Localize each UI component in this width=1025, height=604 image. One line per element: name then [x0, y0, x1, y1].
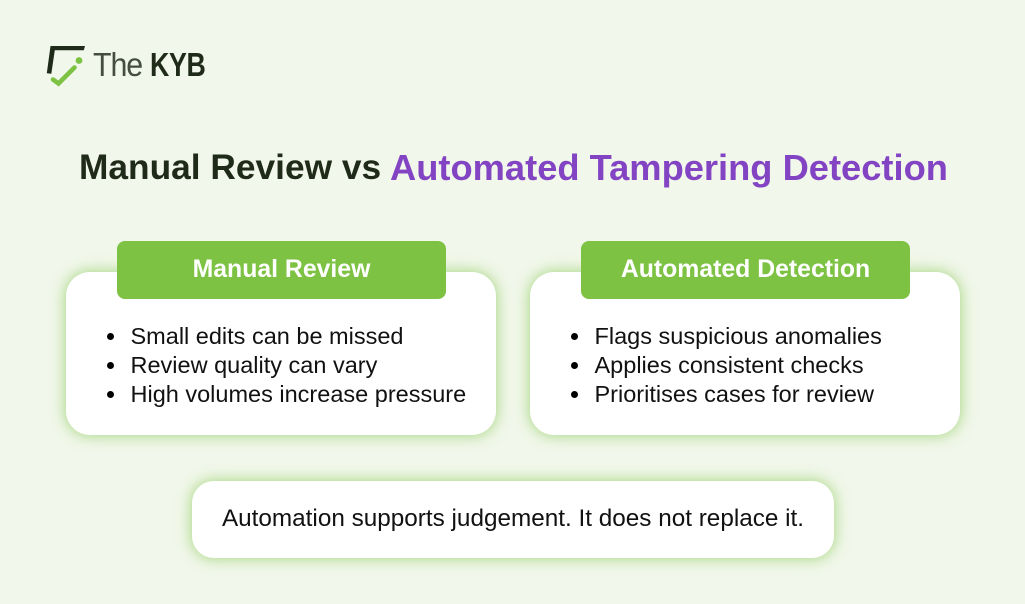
heading: automated detection: [581, 241, 910, 299]
bullet list: [107, 323, 466, 407]
bullet list: Review quality can vary: [130, 352, 377, 378]
heading: automated detection: Automated Detection: [621, 256, 870, 283]
card background: [66, 272, 496, 435]
callout: [192, 481, 834, 558]
title: [79, 147, 948, 188]
icon: shield check: [46, 46, 85, 86]
bullet list: Applies consistent checks: [594, 352, 864, 378]
panel: manual review: [56, 241, 506, 446]
bullet list: Flags suspicious anomalies: [594, 323, 882, 349]
bullet list: High volumes increase pressure: [130, 381, 466, 407]
panel: automated detection: [520, 241, 970, 446]
bullet list: Prioritises cases for review: [594, 381, 874, 407]
title: Automated Tampering Detection: [390, 147, 948, 188]
bullet list: Small edits can be missed: [130, 323, 403, 349]
logo text: KYB: KYB: [150, 46, 205, 83]
card background: [530, 272, 960, 435]
logo: [46, 46, 205, 86]
bullet list: [571, 323, 882, 407]
logo text: The: The: [93, 46, 142, 83]
title: Manual Review vs: [79, 148, 381, 187]
heading: manual review: Manual Review: [193, 256, 370, 283]
callout: Automation supports judgement. It does not replace it.: [222, 505, 804, 532]
heading: manual review: [117, 241, 446, 299]
